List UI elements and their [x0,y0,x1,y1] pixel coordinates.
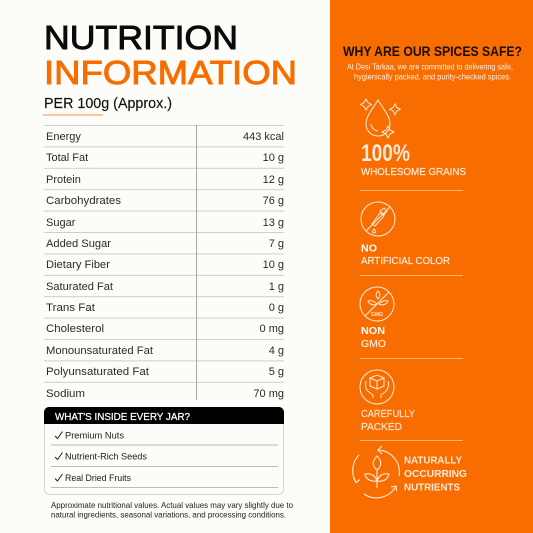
icon: non GMO: GMO [371,312,383,318]
nutrition table: Trans Fat [46,302,95,314]
benefit: wholesome grains: 100% [361,140,410,167]
footnote [51,501,294,520]
nutrition table: 12 g [263,174,284,186]
benefit: carefully packed [361,408,415,433]
nutrition table: Polyunsaturated Fat [46,366,149,378]
nutrition table: 5 g [269,366,284,378]
nutrition table: 7 g [269,238,284,250]
icon: no artificial color dropper [361,202,395,236]
nutrition table: Sugar [46,217,76,229]
benefit: naturally occurring nutrients: OCCURRING [404,468,467,480]
footnote: natural ingredients, seasonal variations, and processing conditions. [51,510,286,520]
nutrition table: Added Sugar [46,238,111,250]
jar heading: WHAT'S INSIDE EVERY JAR? [55,411,190,423]
icon: non GMO [360,287,394,321]
title: NUTRITION [44,19,238,56]
jar heading [44,407,284,424]
nutrition table [44,125,284,400]
benefit: wholesome grains: WHOLESOME GRAINS [361,166,466,178]
title [44,19,297,91]
benefit: non GMO: NON [361,325,385,337]
nutrition table: Saturated Fat [46,281,113,293]
nutrition table: Sodium [46,388,85,400]
nutrition table: Total Fat [46,152,88,164]
nutrition table: Dietary Fiber [46,259,110,271]
nutrition table: 0 mg [260,323,284,335]
benefit: no artificial color [361,242,450,267]
nutrition table: Carbohydrates [46,195,122,207]
panel: nutrition information [43,19,297,520]
nutrition table: 13 g [263,217,284,229]
footnote: Approximate nutritional values. Actual values may vary slightly due to [51,501,294,510]
icon: carefully packed hands and box [360,370,394,404]
jar list: Premium Nuts [65,430,124,440]
benefit: carefully packed: PACKED [361,421,402,433]
benefit: carefully packed: CAREFULLY [361,408,415,420]
nutrition table: 10 g [263,259,284,271]
benefit: wholesome grains [361,140,466,178]
jar list [55,430,147,483]
benefit: naturally occurring nutrients: NUTRIENTS [404,482,460,494]
nutrition table: 76 g [263,195,284,207]
icon: water drop with sparkles [360,99,400,138]
jar list: Nutrient-Rich Seeds [65,452,147,462]
benefit: naturally occurring nutrients: NATURALLY [404,454,462,466]
benefit: naturally occurring nutrients [404,454,467,494]
subtitle: PER 100g (Approx.) [44,95,172,112]
icon: natural cycle with plant [353,446,399,498]
nutrition table: 10 g [263,152,284,164]
nutrition table: 70 mg [253,388,284,400]
nutrition table: Protein [46,174,81,186]
benefit: no artificial color: ARTIFICIAL COLOR [361,255,450,267]
benefit: no artificial color: NO [361,242,377,254]
benefit: non GMO: GMO [361,338,386,350]
nutrition table: 0 g [269,302,284,314]
panel: why are our spices safe [330,0,533,533]
safety intro: hygienically packed, and purity-checked spices. [354,72,511,82]
panel: what's inside every jar [44,407,284,494]
title: INFORMATION [44,54,297,91]
benefit: non GMO [361,325,386,350]
safety intro [347,62,513,82]
jar list: Real Dried Fruits [65,473,131,483]
nutrition table: 1 g [269,281,284,293]
nutrition table: Energy [46,131,81,143]
nutrition table: Cholesterol [46,323,104,335]
nutrition table: 4 g [269,345,284,357]
nutrition table: Monounsaturated Fat [46,345,153,357]
nutrition table: 443 kcal [243,131,284,143]
